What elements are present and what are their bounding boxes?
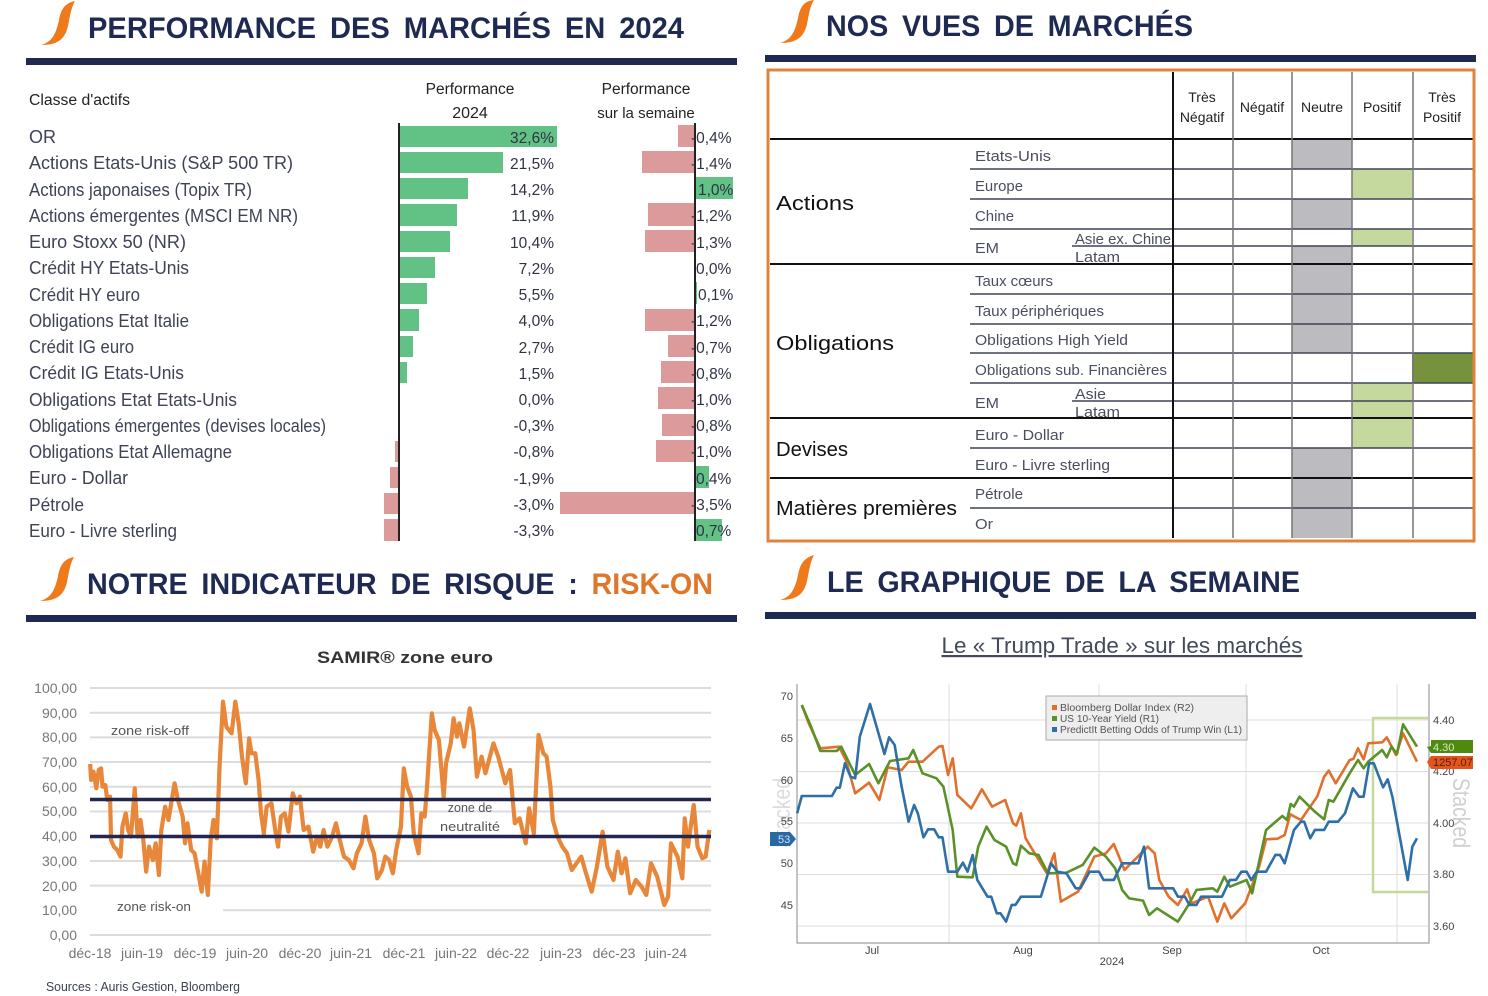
bar chart: performance semaine (560, 123, 734, 541)
bar chart: performance 2024: 10,4% (510, 235, 554, 252)
bar chart: performance 2024: 11,9% (511, 208, 554, 225)
x axis labels: juin-23 (539, 945, 582, 961)
series lines (797, 704, 1417, 922)
y axis labels: 90,00 (42, 705, 77, 721)
zone labels (111, 724, 500, 914)
bar chart: performance semaine: 0,0% (696, 261, 732, 278)
legend: PredictIt Betting Odds of Trump Win (L1) (1060, 725, 1242, 736)
x axis labels: déc-22 (487, 945, 530, 961)
row labels: Latam (1075, 405, 1120, 421)
bar chart: performance semaine: -1,0% (691, 392, 732, 409)
column headers: Très (1428, 89, 1456, 105)
bar chart: performance 2024: 14,2% (510, 182, 554, 199)
logo swoosh (41, 1, 75, 45)
left axis labels: 60 (781, 775, 793, 787)
column header: performance semaine (597, 81, 695, 122)
legend: Bloomberg Dollar Index (R2) (1060, 703, 1194, 714)
x axis labels: juin-21 (329, 945, 372, 961)
chart title: Le « Trump Trade » sur les marchés (942, 633, 1302, 658)
logo swoosh (780, 0, 814, 43)
category labels: Obligations (776, 333, 894, 355)
x axis labels: déc-21 (383, 945, 426, 961)
asset class labels: Obligations émergentes (devises locales) (29, 416, 326, 436)
grid lines (90, 688, 711, 935)
row labels: Euro - Livre sterling (975, 458, 1110, 474)
zone labels: zone risk-on (117, 900, 191, 914)
asset class labels: Crédit HY Etats-Unis (29, 258, 189, 278)
right axis labels (1433, 715, 1454, 933)
column header: performance semaine: sur la semaine (597, 105, 695, 122)
right axis labels: 3.60 (1433, 921, 1454, 933)
x axis labels: juin-19 (120, 945, 163, 961)
value tag: 4.30: 4.30 (1433, 742, 1454, 754)
left axis labels: 55 (781, 816, 793, 828)
row labels: Euro - Dollar (975, 428, 1064, 444)
bar chart: performance 2024: -1,9% (514, 471, 554, 488)
heading: performance des marchés: PERFORMANCE DES MARCHÉS EN 2024 (88, 11, 684, 45)
row labels: Asie ex. Chine (1075, 232, 1171, 248)
bar chart: performance semaine: -0,4% (691, 130, 732, 147)
legend: US 10-Year Yield (R1) (1060, 714, 1159, 725)
x axis labels (865, 945, 1330, 968)
bar chart: performance 2024: 4,0% (519, 313, 554, 330)
zone labels: zone risk-off (111, 724, 190, 738)
x axis labels: Oct (1312, 945, 1330, 957)
row labels (975, 149, 1171, 533)
asset class labels: Obligations Etat Allemagne (29, 442, 232, 462)
bar chart: performance 2024: 7,2% (519, 261, 554, 278)
bar chart: performance 2024: 21,5% (510, 156, 554, 173)
right axis labels: 3.80 (1433, 869, 1454, 881)
y axis labels: 70,00 (42, 754, 77, 770)
row labels: Obligations sub. Financières (975, 363, 1167, 379)
bar chart: performance 2024: -3,3% (514, 523, 554, 540)
x axis labels: déc-23 (593, 945, 636, 961)
SAMIR series (90, 702, 709, 905)
bar chart: performance semaine: 0,7% (696, 523, 732, 540)
highlight box (1373, 718, 1428, 892)
y axis labels: 80,00 (42, 729, 77, 745)
category labels: Devises (776, 439, 848, 461)
row labels: Latam (1075, 250, 1120, 266)
column headers (1180, 89, 1461, 125)
bar chart: performance semaine: -1,4% (691, 156, 732, 173)
y axis labels: 50,00 (42, 803, 77, 819)
watermark: stacked: Stacked (769, 778, 796, 848)
x axis labels: 2024 (1100, 956, 1124, 968)
bar chart: performance 2024: 32,6% (510, 130, 554, 147)
y axis labels (34, 680, 77, 943)
row labels: Asie (1075, 387, 1106, 403)
column headers: Positif (1423, 109, 1461, 125)
column headers: Négatif (1240, 99, 1284, 115)
y axis labels: 10,00 (42, 902, 77, 918)
x axis labels: juin-22 (434, 945, 477, 961)
row labels: Taux cœurs (975, 274, 1053, 290)
bar chart: performance semaine: -0,8% (691, 418, 732, 435)
column header: performance 2024: Performance (426, 81, 514, 98)
zone labels: neutralité (440, 820, 500, 834)
watermark: stacked: Stacked (1447, 778, 1474, 848)
logo swoosh (780, 555, 814, 600)
left axis labels: 65 (781, 733, 793, 745)
right axis labels: 4.20 (1433, 766, 1454, 778)
column header: performance 2024: 2024 (452, 105, 488, 122)
panel: nos vues de marchés (765, 0, 1476, 541)
row labels: EM (975, 241, 999, 257)
asset class labels: Crédit IG euro (29, 337, 134, 357)
bar chart: performance semaine: -1,2% (691, 313, 732, 330)
asset class labels: Euro - Livre sterling (29, 521, 177, 541)
bar chart: performance semaine: -1,3% (691, 235, 732, 252)
panel: indicateur de risque (26, 557, 737, 994)
row labels: Or (975, 517, 993, 533)
asset class labels: Crédit IG Etats-Unis (29, 363, 184, 383)
bar chart: performance 2024: -0,8% (514, 444, 554, 461)
x axis labels: juin-24 (644, 945, 687, 961)
row labels: Pétrole (975, 487, 1023, 503)
line chart: SAMIR (34, 680, 711, 961)
heading rule (765, 612, 1476, 619)
x axis labels: déc-19 (174, 945, 217, 961)
heading rule (26, 58, 737, 65)
logo swoosh (40, 557, 74, 601)
source note: Sources : Auris Gestion, Bloomberg (46, 980, 240, 994)
section rules (770, 72, 1473, 538)
bar chart: performance 2024: 5,5% (519, 287, 554, 304)
bar chart: performance 2024: 0,0% (519, 392, 554, 409)
y axis labels: 40,00 (42, 828, 77, 844)
right axis labels: 4.40 (1433, 715, 1454, 727)
column headers: Très (1188, 89, 1216, 105)
row labels: Europe (975, 179, 1023, 195)
line chart: Trump trade (769, 684, 1474, 968)
category labels: Actions (776, 193, 854, 215)
x axis labels (69, 945, 687, 961)
row labels: Etats-Unis (975, 149, 1051, 165)
heading rule (765, 55, 1476, 62)
bar chart: performance semaine: -1,2% (691, 208, 732, 225)
view cells (1292, 139, 1473, 538)
x axis labels: Jul (865, 945, 879, 957)
column headers: Neutre (1301, 99, 1343, 115)
bar chart: performance semaine: -3,5% (691, 497, 732, 514)
asset class labels: Euro - Dollar (29, 468, 128, 488)
y axis labels: 20,00 (42, 878, 77, 894)
heading rule (26, 615, 737, 622)
axes (797, 684, 1429, 943)
panel: performance des marchés (26, 1, 737, 541)
asset class labels (29, 127, 326, 541)
y axis labels: 100,00 (34, 680, 77, 696)
chart title: SAMIR® zone euro (317, 648, 493, 667)
value tag: 53: 53 (778, 834, 790, 846)
bar chart: performance 2024: 1,5% (519, 366, 554, 383)
column headers: Positif (1363, 99, 1401, 115)
x axis labels: juin-20 (225, 945, 268, 961)
column rules (1233, 72, 1413, 538)
x axis labels: déc-20 (279, 945, 322, 961)
views table (768, 70, 1474, 541)
x axis labels: Sep (1162, 945, 1182, 957)
frame (768, 70, 1474, 541)
column headers: Négatif (1180, 109, 1224, 125)
column header: performance 2024 (426, 81, 514, 122)
category labels (776, 193, 957, 520)
right axis labels: 4.00 (1433, 818, 1454, 830)
bar chart: performance semaine: 0,1% (698, 287, 734, 304)
asset class labels: OR (29, 127, 56, 147)
watermark: stacked (769, 778, 1474, 848)
heading: le graphique de la semaine: LE GRAPHIQUE DE LA SEMAINE (827, 566, 1300, 599)
bar chart: performance semaine: -0,8% (691, 366, 732, 383)
bar chart: performance 2024: 2,7% (519, 340, 554, 357)
panel: graphique de la semaine (765, 555, 1476, 968)
asset class labels: Euro Stoxx 50 (NR) (29, 232, 186, 252)
x axis labels: Aug (1013, 945, 1033, 957)
asset class labels: Crédit HY euro (29, 285, 140, 305)
left axis labels: 50 (781, 858, 793, 870)
left axis labels: 70 (781, 691, 793, 703)
row labels: EM (975, 396, 999, 412)
y axis labels: 60,00 (42, 779, 77, 795)
row rules (970, 169, 1473, 508)
asset class labels: Pétrole (29, 495, 84, 515)
value tag: 1257.07: 1257.07 (1433, 757, 1473, 769)
bar chart: performance 2024: -3,0% (514, 497, 554, 514)
legend (1046, 696, 1247, 740)
row labels: Chine (975, 209, 1014, 225)
asset class labels: Actions Etats-Unis (S&P 500 TR) (29, 153, 293, 173)
left axis labels (781, 691, 793, 912)
asset class labels: Obligations Etat Italie (29, 311, 189, 331)
left axis labels: 45 (781, 900, 793, 912)
row labels: Taux périphériques (975, 304, 1104, 320)
heading: nos vues de marchés: NOS VUES DE MARCHÉS (826, 9, 1193, 43)
bar chart: performance 2024: -0,3% (514, 418, 554, 435)
y axis labels: 30,00 (42, 853, 77, 869)
category labels: Matières premières (776, 498, 957, 520)
zone labels: zone de (448, 801, 492, 815)
bar chart: performance semaine: -0,7% (691, 340, 732, 357)
bar chart: performance semaine: 1,0% (698, 182, 734, 199)
asset class labels: Obligations Etat Etats-Unis (29, 390, 237, 410)
asset class labels: Actions émergentes (MSCI EM NR) (29, 206, 298, 226)
value tag: 53 (770, 832, 796, 846)
bar chart: performance semaine: 0,4% (696, 471, 732, 488)
value tag: 4.30 (1427, 740, 1473, 754)
zone bounds (90, 800, 711, 836)
y axis labels: 0,00 (50, 927, 77, 943)
column header: classe d'actifs: Classe d'actifs (29, 92, 130, 109)
grid lines (797, 684, 1428, 943)
bar chart: performance 2024 (384, 123, 557, 541)
bar chart: performance semaine: -1,0% (691, 444, 732, 461)
row labels: Obligations High Yield (975, 333, 1128, 349)
heading: notre indicateur de risque: NOTRE INDICATEUR DE RISQUE : RISK-ON (87, 568, 713, 601)
x axis labels: déc-18 (69, 945, 112, 961)
asset class labels: Actions japonaises (Topix TR) (29, 180, 252, 200)
column header: performance semaine: Performance (602, 81, 690, 98)
